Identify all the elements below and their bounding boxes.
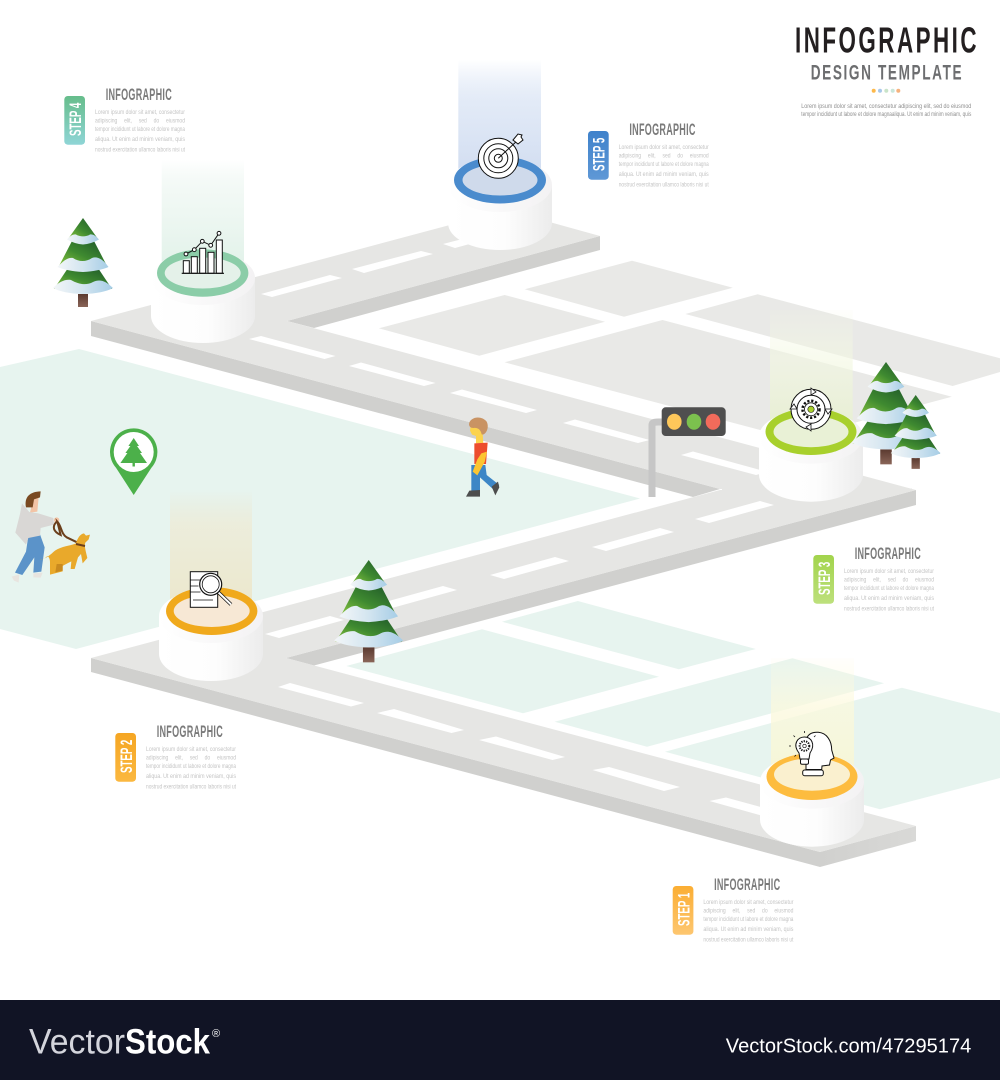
step 2 text block — [115, 723, 237, 790]
step 2 body: aliqua. Ut enim ad minim veniam, quis — [146, 773, 237, 780]
step 4 body — [95, 109, 186, 153]
footer bar — [0, 1000, 1000, 1080]
step 3 badge: STEP 3 — [815, 562, 834, 595]
footer url: VectorStock.com/47295174 — [726, 1036, 971, 1058]
ground panels: mint park area — [0, 349, 640, 649]
road surfaces — [91, 210, 916, 852]
icon: document with magnifier — [190, 572, 231, 607]
isometric road — [91, 210, 916, 867]
ground panels: upper grey blocks — [379, 261, 1000, 439]
step 5 heading: INFOGRAPHIC — [629, 121, 696, 139]
step 2 pedestal — [159, 490, 263, 681]
step 5 text block — [588, 121, 709, 188]
map pin — [110, 428, 157, 495]
step 3 body: adipiscing elit, sed do eiusmod — [844, 576, 934, 583]
step 5 body: aliqua. Ut enim ad minim veniam, quis — [619, 171, 709, 178]
cylinder — [759, 410, 863, 502]
step 3 body: tempor incididunt ut labore et dolore magna — [844, 585, 934, 592]
step 1 text block — [673, 876, 794, 943]
ring — [766, 408, 856, 455]
step 1 body: nostrud exercitation ullamco laboris nisi ut — [703, 936, 794, 943]
light beam — [170, 490, 252, 611]
step 2 body: tempor incididunt ut labore et dolore magna — [146, 763, 236, 770]
icon: gear in cycle arrows — [790, 388, 832, 431]
step 1 body: Lorem ipsum dolor sit amet, consectetur — [703, 899, 794, 906]
step 4 badge: STEP 4 — [66, 102, 85, 136]
step 1 badge: STEP 1 — [674, 893, 693, 926]
icon: target with arrow — [478, 134, 523, 178]
light beam — [458, 60, 541, 180]
step 2 body: Lorem ipsum dolor sit amet, consectetur — [146, 746, 237, 753]
step 1 body — [703, 899, 794, 943]
step 5 body: tempor incididunt ut labore et dolore magna — [619, 161, 709, 168]
step 2 heading: INFOGRAPHIC — [157, 723, 223, 741]
step 1 body: tempor incididunt ut labore et dolore magna — [703, 916, 794, 923]
person — [12, 491, 59, 583]
icon: bar chart — [182, 231, 224, 273]
ring — [766, 753, 858, 800]
step 1 body: aliqua. Ut enim ad minim veniam, quis — [703, 926, 794, 933]
step 2 body: nostrud exercitation ullamco laboris nisi ut — [146, 783, 236, 790]
leash — [54, 522, 83, 545]
ring — [166, 587, 257, 635]
footer logo: Stock — [125, 1022, 210, 1061]
tree: upper left — [53, 218, 113, 307]
title block — [795, 19, 979, 118]
step 4 body: aliqua. Ut enim ad minim veniam, quis — [95, 136, 186, 143]
step 3 heading: INFOGRAPHIC — [855, 545, 921, 563]
step 4 body: Lorem ipsum dolor sit amet, consectetur — [95, 109, 186, 116]
step 2 body — [146, 746, 237, 790]
step 3 text block — [813, 545, 935, 612]
ring — [157, 249, 248, 297]
light beam — [771, 658, 854, 777]
cylinder — [448, 158, 552, 250]
icon: head with light bulb — [789, 731, 834, 776]
step 5 body — [619, 144, 709, 188]
step 3 body: aliqua. Ut enim ad minim veniam, quis — [844, 595, 935, 602]
step 1 pedestal — [760, 658, 864, 847]
step 3 body: Lorem ipsum dolor sit amet, consectetur — [844, 568, 935, 575]
footer logo: ® — [212, 1028, 220, 1040]
footer logo — [29, 1022, 220, 1061]
tree: centre — [334, 560, 403, 662]
man walking dog — [12, 491, 90, 583]
light beam — [770, 310, 853, 432]
step 5 pedestal — [448, 60, 552, 250]
cylinder — [159, 589, 263, 681]
road side faces — [91, 236, 916, 867]
step 4 body: nostrud exercitation ullamco laboris nisi ut — [95, 146, 185, 153]
step 1 heading: INFOGRAPHIC — [714, 876, 780, 894]
step 4 text block — [64, 86, 186, 153]
step 4 body: adipiscing elit, sed do eiusmod — [95, 117, 185, 124]
cylinder — [151, 251, 255, 343]
traffic light — [652, 407, 726, 497]
step 5 body: Lorem ipsum dolor sit amet, consectetur — [619, 144, 709, 151]
ring — [454, 156, 546, 204]
walking person — [466, 417, 499, 497]
footer logo: Vector — [29, 1022, 125, 1061]
step 5 body: adipiscing elit, sed do eiusmod — [619, 152, 709, 159]
ground panels: lower mint blocks — [346, 601, 1000, 809]
step 5 body: nostrud exercitation ullamco laboris nisi ut — [619, 181, 709, 188]
step 5 badge: STEP 5 — [590, 138, 609, 171]
step 3 body: nostrud exercitation ullamco laboris nisi ut — [844, 605, 934, 612]
step 4 body: tempor incididunt ut labore et dolore magna — [95, 126, 185, 133]
step 1 body: adipiscing elit, sed do eiusmod — [703, 907, 794, 914]
step 3 pedestal — [759, 310, 863, 502]
decorative dots — [872, 89, 900, 93]
step 2 body: adipiscing elit, sed do eiusmod — [146, 754, 236, 761]
step 4 heading: INFOGRAPHIC — [106, 86, 172, 104]
intro text — [801, 103, 972, 118]
step 2 badge: STEP 2 — [117, 740, 136, 773]
step 4 pedestal — [151, 160, 255, 343]
cylinder — [760, 755, 864, 847]
trees: right cluster — [852, 362, 941, 469]
light beam — [162, 160, 244, 273]
road lane dashes — [249, 228, 797, 821]
dog — [40, 533, 90, 575]
step 3 body — [844, 568, 935, 612]
